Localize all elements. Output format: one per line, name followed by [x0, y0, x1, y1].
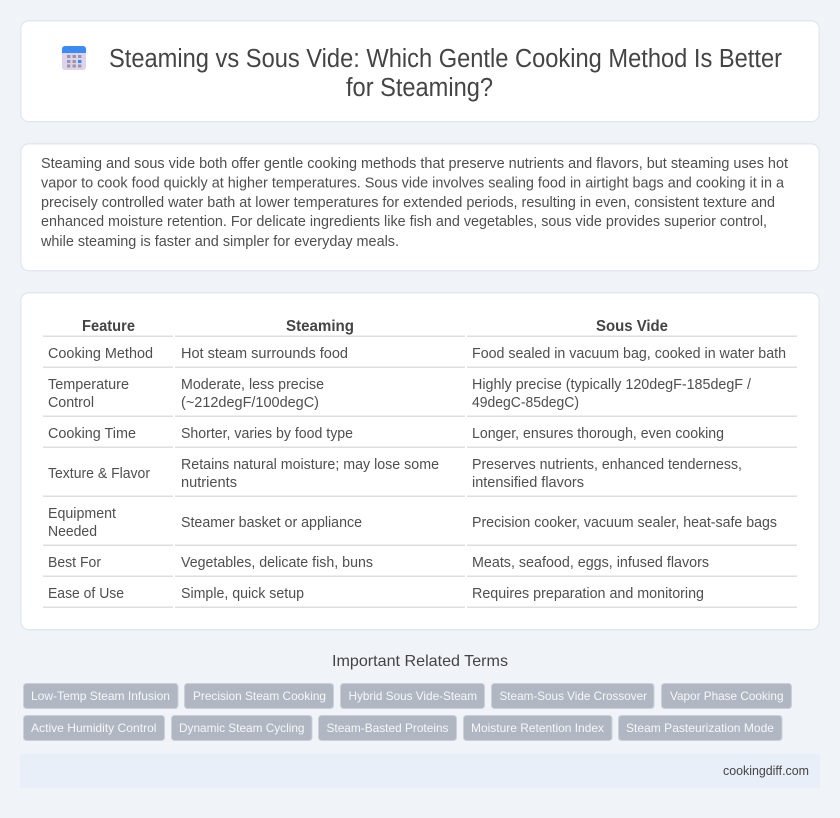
row: texture and flavor: Retains natural moisture; may lose some: [181, 457, 439, 473]
table header row: [43, 318, 797, 337]
row: texture and flavor: Texture & Flavor: [48, 466, 150, 482]
tag: [340, 684, 484, 708]
title: for Steaming?: [346, 74, 493, 102]
row: equipment needed: [43, 506, 797, 546]
tag: Moisture Retention Index: [471, 721, 604, 735]
text block: introduction: Steaming and sous vide both offer gentle cooking methods that preserve nutrients and flavors, but steaming uses hot: [41, 156, 788, 172]
row: cooking method: Cooking Method: [48, 346, 153, 362]
table header row: Sous Vide: [596, 318, 668, 335]
tag: [318, 716, 456, 740]
text block: introduction: vapor to cook food quickly at higher temperatures. Sous vide involves sealing food in airtight bags and cooking it in a: [41, 176, 784, 192]
row: best for: Meats, seafood, eggs, infused flavors: [472, 555, 709, 571]
panel: title header: [21, 21, 819, 122]
tag: [492, 684, 654, 708]
tag: Hybrid Sous Vide-Steam: [348, 689, 477, 703]
row: temperature control: Control: [48, 395, 94, 411]
row: texture and flavor: intensified flavors: [472, 475, 584, 491]
row: temperature control: Temperature: [48, 377, 129, 393]
row: temperature control: Highly precise (typically 120degF-185degF /: [472, 377, 751, 393]
row: cooking time: [43, 426, 797, 448]
heading: important related terms: Important Related Terms: [332, 653, 508, 670]
footer bar: [20, 754, 820, 788]
tag: Steam Pasteurization Mode: [626, 721, 774, 735]
text block: introduction: while steaming is faster and simpler for everyday meals.: [40, 234, 399, 250]
tag: [172, 716, 312, 740]
row: cooking method: Hot steam surrounds food: [181, 346, 348, 362]
tag: [618, 716, 782, 740]
text block: introduction: precisely controlled water bath at lower temperatures for extended periods, resulting in even, consistent texture and: [41, 195, 775, 211]
row: temperature control: (~212degF/100degC): [181, 395, 319, 411]
row: ease of use: Ease of Use: [48, 586, 124, 602]
row: cooking time: Shorter, varies by food type: [181, 426, 353, 442]
row: temperature control: [43, 377, 797, 417]
row: texture and flavor: Preserves nutrients, enhanced tenderness,: [472, 457, 742, 473]
row: temperature control: 49degC-85degC): [472, 395, 579, 411]
tag: Precision Steam Cooking: [193, 689, 326, 703]
icon: calendar: [62, 46, 86, 70]
row: texture and flavor: nutrients: [181, 475, 237, 491]
row: texture and flavor: [43, 457, 797, 497]
text block: introduction: enhanced moisture retention. For delicate ingredients like fish and vegetables, sous vide provides superior control,: [41, 214, 767, 230]
tag: [24, 684, 178, 708]
tag: [184, 684, 334, 708]
tags: related terms: [24, 684, 792, 740]
row: best for: Best For: [48, 555, 101, 571]
title: Steaming vs Sous Vide: Which Gentle Cooking Method Is Better: [109, 45, 782, 73]
tag: Steam-Sous Vide Crossover: [500, 689, 647, 703]
row: equipment needed: Steamer basket or appliance: [181, 515, 362, 531]
row: equipment needed: Needed: [48, 524, 97, 540]
row: cooking time: Longer, ensures thorough, even cooking: [472, 426, 724, 442]
table header row: Steaming: [286, 318, 354, 335]
tag: Active Humidity Control: [31, 721, 156, 735]
tag: Vapor Phase Cooking: [670, 689, 784, 703]
panel: comparison table: [21, 293, 819, 630]
table header row: Feature: [82, 318, 135, 335]
tag: Low-Temp Steam Infusion: [31, 689, 170, 703]
row: cooking method: Food sealed in vacuum bag, cooked in water bath: [472, 346, 786, 362]
row: ease of use: [43, 586, 797, 608]
tag: [662, 684, 792, 708]
footer source text: cookingdiff.com: [723, 763, 809, 778]
tag: [464, 716, 612, 740]
row: best for: Vegetables, delicate fish, buns: [181, 555, 373, 571]
panel: intro text: [21, 144, 819, 271]
tag: Steam-Basted Proteins: [326, 721, 448, 735]
text block: introduction: [40, 156, 788, 250]
row: cooking time: Cooking Time: [48, 426, 136, 442]
row: equipment needed: Equipment: [48, 506, 116, 522]
row: ease of use: Simple, quick setup: [181, 586, 304, 602]
title: [109, 45, 782, 102]
tag: Dynamic Steam Cycling: [179, 721, 304, 735]
row: equipment needed: Precision cooker, vacuum sealer, heat-safe bags: [472, 515, 777, 531]
row: temperature control: Moderate, less precise: [181, 377, 324, 393]
row: cooking method: [43, 346, 797, 368]
tag: [24, 716, 164, 740]
row: best for: [43, 555, 797, 577]
row: ease of use: Requires preparation and monitoring: [472, 586, 704, 602]
